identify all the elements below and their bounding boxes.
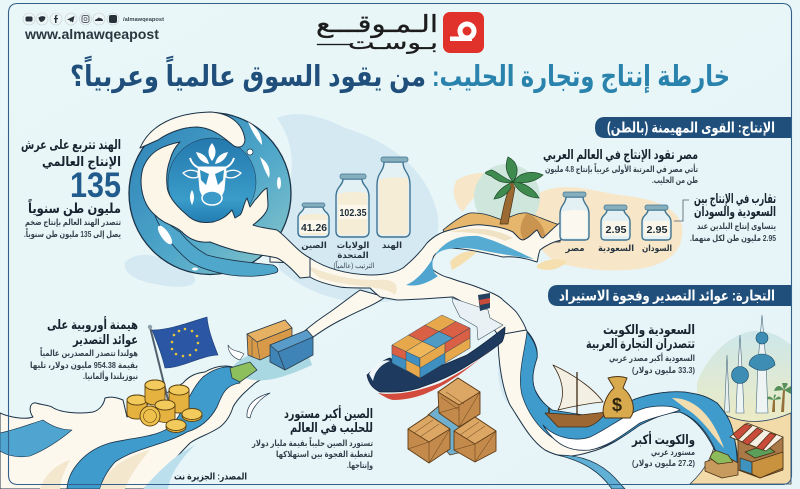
bottle: Egypt: مصر (565, 243, 584, 254)
source: المصدر: الجزيرة نت (174, 472, 247, 482)
blue wave band (435, 236, 534, 259)
milk ball with swirl (129, 112, 310, 278)
lower branch (558, 455, 625, 489)
text: Saudi and Sudan: 2.95 مليون طن لكل منهما. (690, 233, 776, 244)
river: lower left trade stream (0, 290, 385, 489)
palm trunk (500, 186, 515, 224)
blue container (270, 330, 313, 370)
text: India leads: مليون طن سنوياً (28, 198, 121, 216)
text: China biggest importer: وإنتاجها. (347, 460, 373, 471)
text: Kuwait biggest importer: (27.2 مليون دولار) (632, 458, 695, 469)
social icons (23, 13, 119, 25)
ship (367, 293, 505, 400)
website: www.almawqeapost (24, 27, 160, 42)
connector (674, 200, 689, 221)
label: الصين (301, 240, 327, 251)
text: China biggest importer: لتغطية الفجوة بين استهلاكها (276, 449, 373, 460)
bottle: China (298, 203, 329, 251)
text: Europe dominance: بقيمة 954.38 مليون دولار، تليها (30, 360, 138, 371)
text: Egypt leads: تأتي مصر في المرتبة الأولى عربياً بإنتاج 4.8 مليون (545, 162, 698, 175)
text: Europe dominance: نيوزيلندا وألمانيا. (83, 370, 138, 382)
section pill: production (595, 117, 791, 138)
blue sphere (129, 112, 291, 274)
hull (367, 327, 505, 392)
sand dunes (443, 213, 560, 242)
left blue band (0, 420, 72, 457)
funnel (478, 293, 490, 311)
market stall (705, 423, 783, 478)
bottle: United States (336, 174, 369, 260)
text: India leads: الإنتاج العالمي (42, 154, 121, 170)
inner circle (168, 138, 256, 226)
palm fronds (485, 157, 543, 199)
social handle: /almawqeapost (123, 17, 164, 23)
sand blob behind Arab bottles (454, 173, 682, 270)
EU flag (148, 317, 218, 400)
bottle: Saudi Arabia: السعودية (598, 243, 634, 254)
crate right (454, 417, 496, 462)
text: India leads (21, 137, 121, 240)
containers (392, 315, 470, 378)
river: ship to market stream (498, 330, 737, 489)
money bag: $ (612, 395, 622, 415)
logo wordmark: الـمـوقـــع (316, 11, 438, 38)
milk body (0, 290, 385, 489)
stars (171, 328, 199, 357)
splash (228, 345, 244, 360)
bottle: Saudi Arabia: 2.95 (606, 224, 627, 236)
superstructure (452, 298, 503, 340)
text: Egypt leads (543, 147, 698, 186)
text: China biggest importer: تستورد الصين حليباً بقيمة مليار دولار (251, 436, 373, 449)
milk highlights (155, 122, 281, 270)
blue crate behind (428, 405, 470, 455)
pale edge (143, 445, 195, 489)
red keel (378, 348, 492, 400)
orange container (247, 320, 292, 360)
hills (697, 331, 791, 421)
lower blue curl (150, 198, 278, 276)
text: Kuwait biggest importer: والكويت أكبر (631, 431, 695, 447)
text: Saudi and Kuwait: تتصدران التجارة العربية (586, 336, 695, 351)
bottle: Sudan (642, 205, 672, 254)
oasis under containers (232, 345, 312, 380)
Arab bottles chart (560, 192, 672, 254)
gold coins (127, 380, 202, 432)
white crest (543, 406, 680, 450)
blue water (520, 332, 737, 470)
dhow (545, 365, 607, 427)
title (70, 56, 730, 94)
bottle: Sudan: 2.95 (646, 224, 668, 236)
text: Saudi and Sudan (690, 191, 776, 244)
icon: cow (183, 143, 241, 205)
text: Europe dominance: هولندا تتصدر المصدرين عالمياً (39, 346, 138, 359)
top crest (140, 112, 245, 148)
bottle: Sudan: السودان (642, 243, 672, 254)
text: Kuwait biggest importer (631, 431, 695, 469)
money bag (603, 376, 633, 418)
text: Egypt leads: مصر تقود الإنتاج في العالم العربي (543, 147, 698, 163)
small palms (781, 390, 785, 412)
text: Saudi and Kuwait: السعودية والكويت (603, 322, 695, 337)
bottle: Saudi Arabia (598, 205, 634, 254)
cream streak (672, 398, 724, 448)
oasis backdrop (474, 164, 540, 230)
label: الهند (382, 240, 402, 251)
text: Saudi and Kuwait (586, 322, 695, 376)
logo (316, 11, 484, 54)
milk ribbon (141, 142, 310, 278)
main blue band (67, 367, 240, 489)
towers (724, 355, 730, 412)
text: Saudi and Sudan: يتساوى إنتاج البلدين عند (697, 221, 776, 232)
cream streaks (300, 262, 397, 295)
main milk stream (270, 222, 567, 340)
cream strip (100, 450, 150, 489)
blue core (406, 258, 438, 286)
island with palm (443, 157, 560, 242)
label: الولايات (337, 240, 369, 251)
sand (680, 400, 791, 484)
logo wordmark: بـوسـت (348, 33, 438, 54)
big number: 135 (70, 166, 121, 205)
wooden crates (408, 378, 496, 463)
text: India leads: تتصدر الهند العالم بإنتاج ضخم (25, 217, 121, 228)
logo mark (443, 12, 484, 53)
text: India leads: يصل إلى 135 مليون طن سنوياً. (24, 227, 121, 240)
text: China biggest importer: للحليب في العالم (290, 420, 373, 435)
bow deck (369, 360, 390, 381)
text: China biggest importer (251, 405, 373, 471)
text: Saudi and Kuwait: السعودية أكبر مصدر عربي (609, 352, 695, 364)
crate left (408, 415, 450, 463)
ranking note: الترتيب (عالمياً) (334, 260, 375, 270)
text: India leads: الهند تتربع على عرش (21, 137, 121, 152)
text: Saudi and Kuwait: (33.3 مليون دولار) (632, 365, 695, 376)
text: Europe dominance (30, 316, 138, 382)
value: 102.35 (340, 207, 367, 219)
text: Europe dominance: هيمنة أوروبية على (47, 316, 138, 332)
title part dark: من يقود السوق عالمياً وعربياً؟ (70, 56, 426, 93)
text: Kuwait biggest importer: مستورد عربي (651, 447, 695, 458)
shipping containers (228, 320, 313, 382)
text: China biggest importer: الصين أكبر مستورد (284, 405, 373, 421)
milk body (498, 330, 737, 470)
header: social links (23, 13, 164, 42)
cash bundle (230, 362, 257, 382)
global bottles chart (298, 157, 410, 270)
value: 41.26 (301, 222, 327, 234)
text: Egypt leads: طن من الحليب. (652, 175, 698, 186)
bottle: United States: المتحدة (337, 250, 369, 260)
text: Europe dominance: عوائد التصدير (72, 332, 138, 347)
pale blue backdrop behind global bottles (125, 114, 525, 420)
Kuwait towers scene (680, 315, 791, 484)
logo wordmark (316, 11, 438, 54)
cream curls (450, 251, 477, 270)
crate top (438, 378, 480, 427)
crest tip (247, 393, 270, 418)
